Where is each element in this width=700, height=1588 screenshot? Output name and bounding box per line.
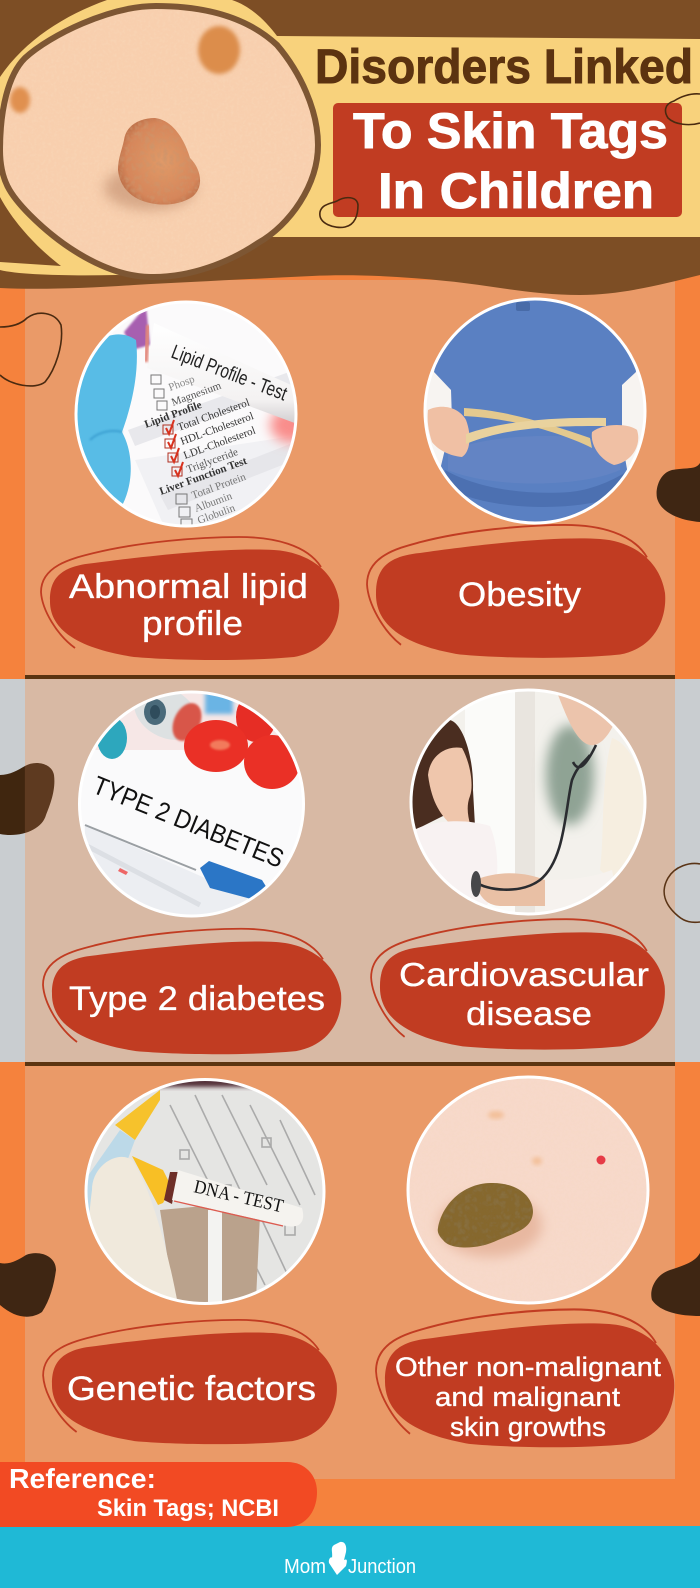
- heading box: [333, 103, 682, 219]
- text: test checklist: [143, 373, 257, 527]
- divider: row one and two: [25, 675, 675, 679]
- text: type 2 diabetes strip: TYPE 2 DIABETES: [89, 770, 288, 874]
- yellow photo surround: [0, 0, 700, 275]
- decoration: filled blob right: [651, 1253, 700, 1316]
- photo: obesity with measuring tape: [420, 290, 650, 530]
- footer bar: [0, 1526, 700, 1588]
- text: test checklist: Globulin: [196, 502, 237, 527]
- panel: third row: [0, 1066, 700, 1479]
- panel: first row: [0, 280, 700, 675]
- text: test checklist: Lipid Profile: [143, 399, 204, 431]
- text: test checklist: Liver Function Test: [158, 455, 249, 498]
- brown background wave: [0, 0, 700, 295]
- label: type 2 diabetes: [43, 929, 341, 1054]
- photo: skin growth: [406, 1076, 650, 1304]
- header banner: [0, 0, 700, 295]
- text: test checklist: Triglyceride: [185, 446, 240, 476]
- photo: lipid profile test: [74, 300, 298, 528]
- reference box: [0, 1462, 317, 1527]
- label: abnormal lipid profile: profile: [142, 605, 243, 643]
- decoration: filled blob right: [657, 463, 700, 522]
- text: test checklist: Magnesium: [170, 380, 223, 409]
- logo: momjunction: Junction: [348, 1556, 416, 1578]
- reference box: Reference:: [9, 1463, 156, 1494]
- photo: child with stethoscope: [405, 685, 655, 920]
- label: other skin growths: [376, 1309, 674, 1447]
- decoration: outline blob top right: [666, 94, 700, 125]
- text: test checklist: Total Protein: [190, 471, 248, 502]
- label: other skin growths: skin growths: [450, 1412, 606, 1442]
- label: cardiovascular disease: [371, 919, 665, 1050]
- label: cardiovascular disease: disease: [466, 995, 592, 1032]
- photo: skin tag close-up: [0, 0, 325, 285]
- label: genetic factors: [43, 1320, 337, 1444]
- panel: second row: [0, 675, 700, 1062]
- decoration: outline blob lower left: [320, 198, 358, 227]
- label: other skin growths: Other non-malignant: [395, 1352, 662, 1382]
- photo: dna test tube: [80, 1075, 330, 1310]
- text: test checklist: Albumin: [193, 490, 234, 515]
- divider: row two and three: [25, 1062, 675, 1066]
- heading box: In Children: [378, 163, 654, 219]
- text: test checklist: Total Cholesterol: [176, 397, 251, 434]
- label: cardiovascular disease: Cardiovascular: [399, 956, 649, 993]
- icon: checkboxes: [151, 375, 192, 529]
- reference box: Skin Tags; NCBI: [97, 1495, 279, 1522]
- label: other skin growths: and malignant: [435, 1382, 621, 1412]
- text: test checklist: Phosp: [167, 373, 197, 394]
- label: abnormal lipid profile: Abnormal lipid: [69, 568, 308, 606]
- decoration: filled blob left: [0, 763, 54, 835]
- photo: type 2 diabetes: [78, 690, 305, 918]
- icon: mother and heart: [329, 1542, 347, 1575]
- logo: momjunction: Mom: [284, 1556, 326, 1578]
- decoration: outlined blob right: [664, 864, 700, 922]
- text: lipid tube label: Lipid Profile - Test: [168, 341, 290, 406]
- label: abnormal lipid profile: [41, 537, 339, 660]
- text: dna test tube label: DNA - TEST: [192, 1176, 286, 1217]
- logo: momjunction: [284, 1542, 416, 1578]
- decoration: outlined blob left: [0, 313, 62, 386]
- label: obesity: Obesity: [458, 576, 581, 614]
- label: type 2 diabetes: Type 2 diabetes: [69, 980, 325, 1018]
- heading box: To Skin Tags: [353, 103, 668, 159]
- heading line one: Disorders Linked: [315, 41, 693, 94]
- label: obesity: [367, 525, 665, 658]
- decoration: filled blob left: [0, 1253, 56, 1317]
- text: test checklist: LDL-Cholesterol: [182, 425, 257, 462]
- text: test checklist: HDL-Cholesterol: [179, 410, 255, 448]
- label: genetic factors: Genetic factors: [67, 1370, 316, 1408]
